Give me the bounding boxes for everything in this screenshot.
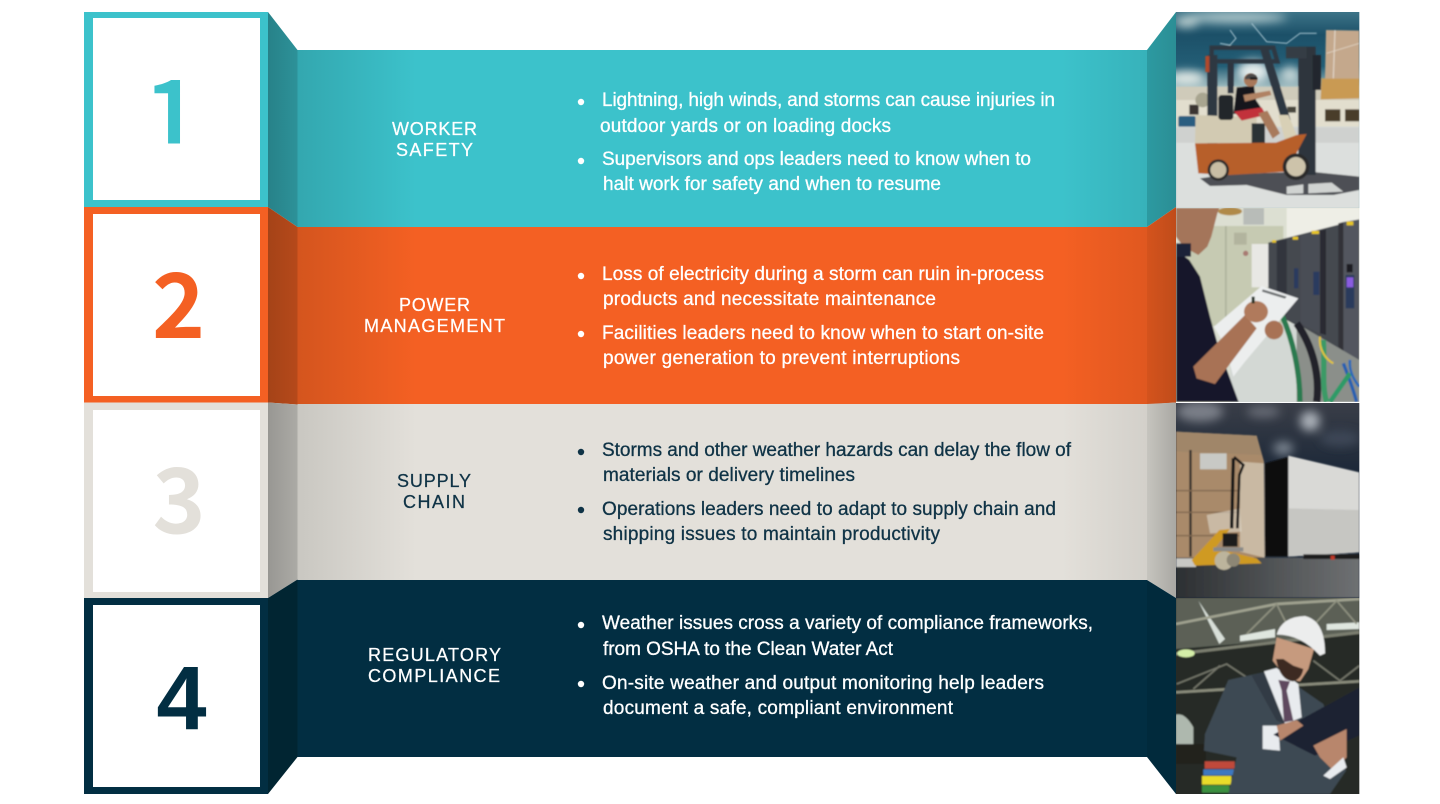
band 3 xyxy=(298,404,1147,580)
row 3: supply chain xyxy=(84,401,1362,599)
bullet list 4 xyxy=(578,613,1093,719)
number box 4: 4 xyxy=(156,649,207,749)
bullet list 3: shipping issues to maintain productivity xyxy=(603,524,940,545)
heading: power management: MANAGEMENT xyxy=(364,316,505,336)
bullet list 1 xyxy=(578,90,1055,195)
heading: supply chain: SUPPLY xyxy=(397,471,471,491)
bullet list 3: materials or delivery timelines xyxy=(603,465,855,486)
number box 2: 2 xyxy=(152,234,205,364)
bullet list 2: Facilities leaders need to know when to start on-site xyxy=(602,323,1044,344)
left fold 4 xyxy=(268,580,298,794)
photo: pallet and trailer under a dark sky xyxy=(1173,401,1362,599)
heading: regulatory compliance: COMPLIANCE xyxy=(368,666,500,686)
bullet list 2: power generation to prevent interruptions xyxy=(603,348,960,369)
bullet list 3: Storms and other weather hazards can delay the flow of xyxy=(602,440,1072,461)
bullet list 1: halt work for safety and when to resume xyxy=(603,174,941,195)
bullet list 4: Weather issues cross a variety of compliance frameworks, xyxy=(602,613,1093,634)
left fold 1 xyxy=(268,12,298,227)
heading: worker safety: SAFETY xyxy=(396,140,473,160)
number box 1 xyxy=(84,12,268,208)
right fold 3 xyxy=(1147,402,1176,598)
right fold 4 xyxy=(1147,580,1176,794)
left fold 2 xyxy=(268,207,298,404)
row 1: worker safety xyxy=(84,10,1362,227)
number box 3: 3 xyxy=(152,429,206,559)
bullet list 3: Operations leaders need to adapt to supply chain and xyxy=(602,499,1056,520)
number box 2 xyxy=(84,207,268,403)
bullet list 4: document a safe, compliant environment xyxy=(603,698,954,719)
bullet list 3 xyxy=(578,440,1072,545)
bullet list 4: On-site weather and output monitoring help leaders xyxy=(602,673,1044,694)
row 4: regulatory compliance xyxy=(84,580,1362,796)
left fold 3 xyxy=(268,402,298,598)
photo: engineer in hard hat reading a clipboard xyxy=(1173,596,1362,796)
heading: power management: POWER xyxy=(399,295,470,315)
band 4 xyxy=(298,580,1147,757)
bullet list 1: Supervisors and ops leaders need to know when to xyxy=(602,149,1031,170)
photo: technician with clipboard at control panels xyxy=(1173,206,1362,404)
right fold 2 xyxy=(1147,207,1176,404)
band 1 xyxy=(298,50,1147,227)
heading: regulatory compliance xyxy=(368,645,501,686)
heading: worker safety: WORKER xyxy=(392,119,477,139)
photo: forklift driver in a lightning storm xyxy=(1168,10,1362,210)
row 2: power management xyxy=(84,206,1362,404)
bullet list 1: outdoor yards or on loading docks xyxy=(600,116,891,137)
heading: supply chain: CHAIN xyxy=(403,492,465,512)
heading: regulatory compliance: REGULATORY xyxy=(368,645,501,665)
heading: power management xyxy=(364,295,505,336)
number box 3 xyxy=(84,402,268,598)
band 2 xyxy=(298,227,1147,404)
bullet list 1: Lightning, high winds, and storms can cause injuries in xyxy=(602,90,1055,111)
heading: worker safety xyxy=(392,119,477,160)
bullet list 4: from OSHA to the Clean Water Act xyxy=(603,639,894,660)
number box 4 xyxy=(84,598,268,794)
bullet list 2 xyxy=(578,264,1044,369)
number box 1: 1 xyxy=(143,34,201,184)
bullet list 2: products and necessitate maintenance xyxy=(603,289,936,310)
bullet list 2: Loss of electricity during a storm can ruin in-process xyxy=(602,264,1044,285)
right fold 1 xyxy=(1147,12,1176,227)
heading: supply chain xyxy=(397,471,471,512)
